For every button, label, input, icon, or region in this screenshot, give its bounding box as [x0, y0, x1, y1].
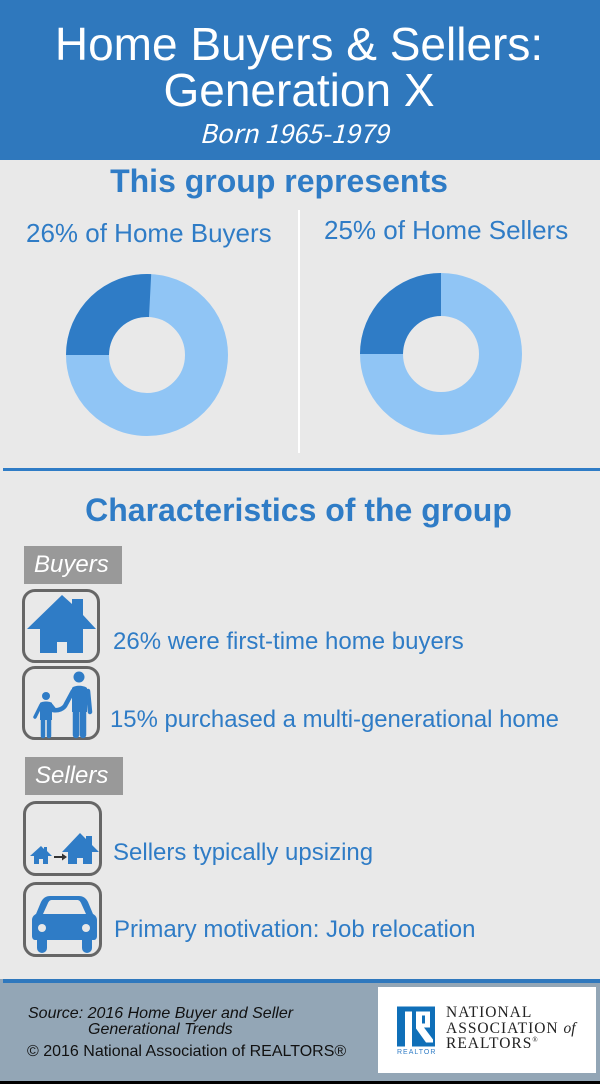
donut chart: buyers — [66, 274, 228, 436]
logo mark — [397, 1006, 435, 1046]
tag: sellers: Sellers — [35, 762, 108, 789]
copyright: © 2016 National Association of REALTORS® — [27, 1043, 346, 1060]
text: upsizing: Sellers typically upsizing — [113, 839, 373, 866]
buyers share label: 26% of Home Buyers — [26, 218, 272, 248]
icon: upsizing houses — [23, 801, 102, 876]
title: Home Buyers & Sellers: — [55, 18, 543, 70]
sellers share label: 25% of Home Sellers — [324, 215, 568, 245]
bottom black strip — [0, 1081, 600, 1084]
tag: buyers — [24, 546, 122, 584]
realtor wordmark: REALTOR — [397, 1049, 436, 1056]
association name: NATIONAL — [446, 1004, 532, 1021]
icon: house — [22, 589, 100, 663]
section divider — [3, 468, 600, 471]
text: motivation: Primary motivation: Job relocation — [114, 916, 475, 943]
association name: ASSOCIATION of — [446, 1020, 576, 1036]
logo panel — [378, 987, 596, 1073]
icon: car — [23, 882, 102, 957]
footer band — [0, 979, 600, 1084]
association name — [446, 1004, 578, 1052]
tag: sellers — [25, 757, 123, 795]
icon: parent and child — [22, 666, 100, 740]
source note: Generational Trends — [88, 1021, 233, 1038]
vertical divider — [298, 210, 300, 453]
text: multi-generational: 15% purchased a multi-generational home — [110, 706, 559, 733]
donut chart: sellers — [360, 273, 522, 435]
footer rule — [3, 979, 600, 983]
tag: buyers: Buyers — [34, 551, 109, 578]
header banner — [0, 0, 600, 160]
association name: REALTORS® — [446, 1035, 539, 1052]
title: Generation X — [163, 64, 435, 116]
subtitle: Born 1965-1979 — [199, 114, 389, 151]
source note: Source: 2016 Home Buyer and Seller — [28, 1005, 293, 1022]
source note — [28, 1005, 294, 1038]
heading: this group represents: This group represents — [110, 163, 448, 199]
text: first-time buyers: 26% were first-time home buyers — [113, 628, 464, 655]
title — [55, 18, 543, 116]
heading: characteristics: Characteristics of the group — [85, 492, 512, 528]
